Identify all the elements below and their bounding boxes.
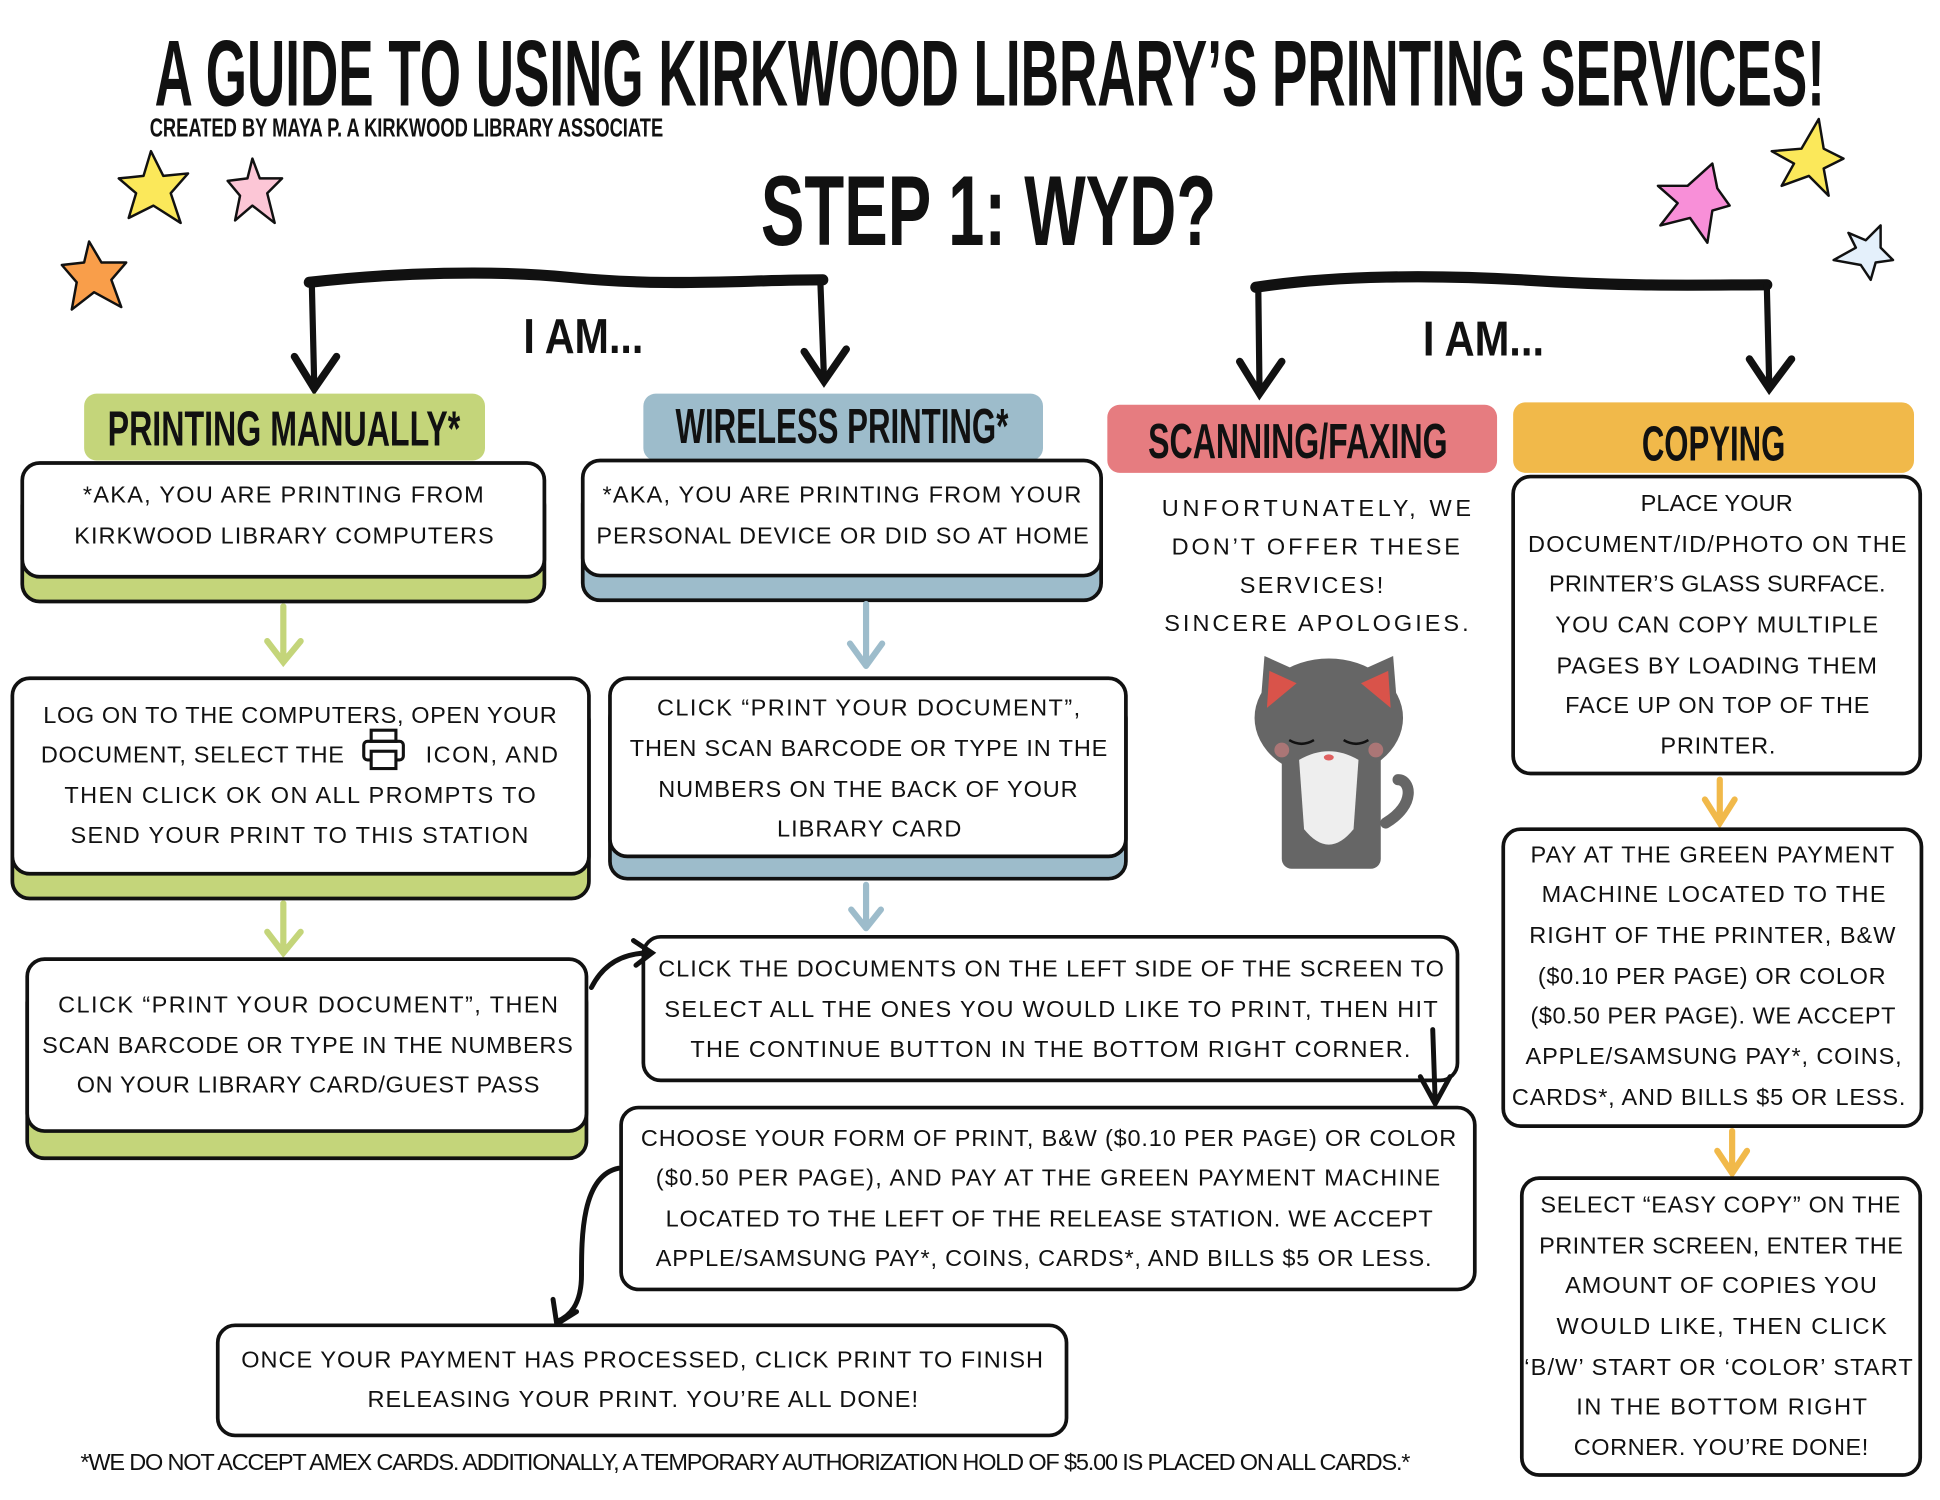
box 6: SELECT ALL THE ONES YOU WOULD LIKE TO PRINT, THEN HIT	[664, 996, 1438, 1022]
box 2: SEND YOUR PRINT TO THIS STATION	[71, 822, 528, 848]
box 6: THE CONTINUE BUTTON IN THE BOTTOM RIGHT CORNER.	[690, 1036, 1410, 1062]
panel: printing manually	[12, 394, 589, 1158]
box 1	[22, 463, 544, 602]
box 3: CLICK “PRINT YOUR DOCUMENT”, THEN	[58, 991, 558, 1017]
step heading: STEP 1: WYD?	[761, 155, 1216, 266]
arrow down to box 7	[1420, 1030, 1450, 1104]
box 11: WOULD LIKE, THEN CLICK	[1556, 1313, 1887, 1339]
box 6	[643, 937, 1457, 1080]
box 2	[12, 678, 589, 898]
box 9: DOCUMENT/ID/PHOTO ON THE	[1528, 531, 1907, 557]
arrow green	[267, 606, 301, 662]
header: wireless	[643, 394, 1043, 460]
text: apology: DON’T OFFER THESE	[1172, 534, 1460, 560]
box 11: SELECT “EASY COPY” ON THE	[1540, 1192, 1900, 1218]
box 4	[583, 460, 1101, 600]
box 10: MACHINE LOCATED TO THE	[1542, 881, 1886, 907]
box 4: *AKA, YOU ARE PRINTING FROM YOUR	[603, 482, 1081, 508]
header: copying: COPYING	[1642, 416, 1785, 471]
arrow blue	[850, 604, 882, 666]
I AM labels: I AM...	[523, 309, 643, 364]
box 7: CHOOSE YOUR FORM OF PRINT, B&W ($0.10 PER PAGE) OR COLOR	[641, 1125, 1456, 1151]
box 7	[621, 1108, 1475, 1289]
box 10: APPLE/SAMSUNG PAY*, COINS,	[1526, 1043, 1902, 1069]
box 7: APPLE/SAMSUNG PAY*, COINS, CARDS*, AND BILLS $5 OR LESS.	[656, 1245, 1431, 1271]
box 10: CARDS*, AND BILLS $5 OR LESS.	[1512, 1084, 1905, 1110]
icon: printer	[364, 730, 403, 769]
box 11: PRINTER SCREEN, ENTER THE	[1539, 1233, 1903, 1259]
text: apology: SERVICES!	[1240, 572, 1383, 598]
box 2: LOG ON TO THE COMPUTERS, OPEN YOUR	[43, 702, 557, 728]
arrow orange 2	[1717, 1131, 1747, 1173]
box 9: PLACE YOUR	[1641, 490, 1793, 516]
box 9: PRINTER.	[1660, 733, 1775, 759]
header: copying	[1513, 402, 1914, 473]
text: I AM...	[1423, 311, 1544, 366]
bracket arrows	[294, 273, 1792, 394]
icon: cat	[1255, 656, 1408, 869]
box 8: ONCE YOUR PAYMENT HAS PROCESSED, CLICK PRINT TO FINISH	[241, 1346, 1043, 1372]
box 3: SCAN BARCODE OR TYPE IN THE NUMBERS	[42, 1032, 573, 1058]
box 10: ($0.50 PER PAGE). WE ACCEPT	[1530, 1002, 1895, 1028]
header: printing manually: PRINTING MANUALLY*	[108, 402, 461, 457]
box 1: KIRKWOOD LIBRARY COMPUTERS	[74, 522, 494, 548]
box 7: LOCATED TO THE LEFT OF THE RELEASE STATION. WE ACCEPT	[666, 1205, 1433, 1231]
box 11: ‘B/W’ START OR ‘COLOR’ START	[1524, 1354, 1913, 1380]
header: wireless: WIRELESS PRINTING*	[676, 399, 1009, 454]
box 5: LIBRARY CARD	[777, 816, 961, 842]
box 5: CLICK “PRINT YOUR DOCUMENT”,	[657, 694, 1080, 720]
header: scanning	[1107, 405, 1497, 473]
box 9: YOU CAN COPY MULTIPLE	[1555, 611, 1878, 637]
arrow green 2	[267, 903, 301, 953]
box 1: *AKA, YOU ARE PRINTING FROM	[83, 482, 484, 508]
box 9: PRINTER’S GLASS SURFACE.	[1549, 571, 1886, 597]
box 11: IN THE BOTTOM RIGHT	[1576, 1393, 1867, 1419]
box 5: NUMBERS ON THE BACK OF YOUR	[658, 776, 1078, 802]
box 9: FACE UP ON TOP OF THE	[1565, 692, 1869, 718]
box 2: ICON, AND	[426, 741, 558, 767]
box 6: CLICK THE DOCUMENTS ON THE LEFT SIDE OF THE SCREEN TO	[658, 955, 1444, 981]
box 10: ($0.10 PER PAGE) OR COLOR	[1538, 963, 1886, 989]
box 8	[218, 1325, 1067, 1435]
stars	[62, 119, 1893, 310]
arrow curved to box 6	[591, 941, 652, 988]
box 3	[27, 959, 586, 1158]
arrow curved to box 8	[553, 1168, 619, 1324]
text: apology: SINCERE APOLOGIES.	[1164, 610, 1469, 636]
panel: copying	[1503, 402, 1921, 1475]
box 3: ON YOUR LIBRARY CARD/GUEST PASS	[77, 1072, 539, 1098]
box 9	[1513, 477, 1920, 774]
box 11: AMOUNT OF COPIES YOU	[1565, 1272, 1877, 1298]
box 2: DOCUMENT, SELECT THE	[41, 741, 344, 767]
box 10: PAY AT THE GREEN PAYMENT	[1530, 842, 1894, 868]
box 5: THEN SCAN BARCODE OR TYPE IN THE	[630, 735, 1107, 761]
box 5	[610, 678, 1126, 879]
footnote: *WE DO NOT ACCEPT AMEX CARDS. ADDITIONALLY, A TEMPORARY AUTHORIZATION HOLD OF $5.00 IS PLACED ON ALL CARDS.*	[80, 1449, 1410, 1475]
box 11: CORNER. YOU’RE DONE!	[1574, 1434, 1868, 1460]
arrow orange	[1705, 780, 1735, 823]
box 11	[1522, 1178, 1920, 1475]
panel: scanning/faxing	[1107, 405, 1497, 869]
box 10	[1503, 829, 1921, 1126]
text: apology: UNFORTUNATELY, WE	[1162, 495, 1471, 521]
header: scanning: SCANNING/FAXING	[1148, 414, 1448, 469]
box 7: ($0.50 PER PAGE), AND PAY AT THE GREEN PAYMENT MACHINE	[656, 1165, 1440, 1191]
box 4: PERSONAL DEVICE OR DID SO AT HOME	[596, 522, 1089, 548]
box 10: RIGHT OF THE PRINTER, B&W	[1529, 922, 1896, 948]
subtitle: CREATED BY MAYA P. A KIRKWOOD LIBRARY ASSOCIATE	[150, 112, 663, 142]
box 8: RELEASING YOUR PRINT. YOU’RE ALL DONE!	[367, 1386, 918, 1412]
header: printing manually	[84, 394, 485, 460]
arrow blue 2	[851, 885, 881, 928]
text: apology	[1162, 495, 1471, 636]
box 9: PAGES BY LOADING THEM	[1556, 652, 1877, 678]
box 2: THEN CLICK OK ON ALL PROMPTS TO	[64, 782, 536, 808]
panel: wireless printing	[218, 394, 1475, 1435]
